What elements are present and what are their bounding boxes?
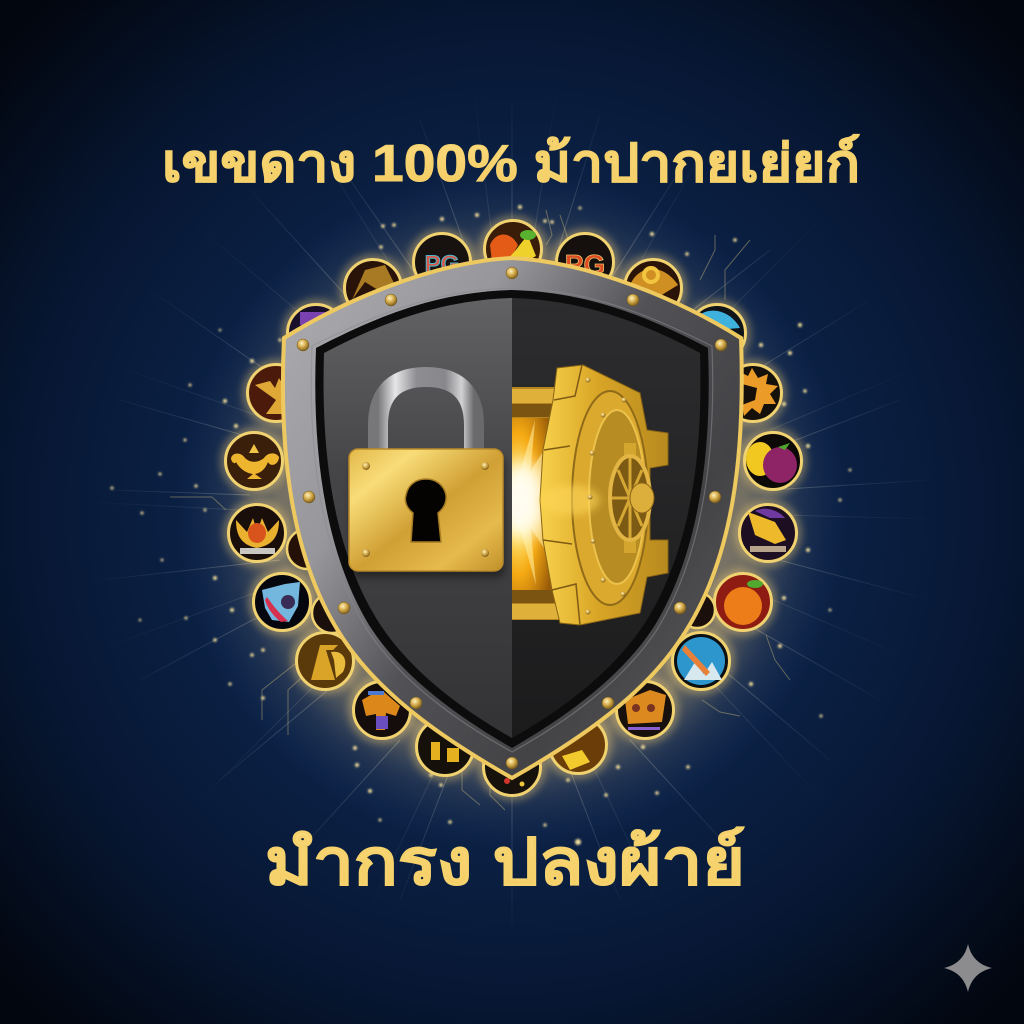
- badge: plum and apple: [744, 432, 802, 490]
- shield: [283, 258, 742, 778]
- badge: fire phoenix: [724, 364, 782, 422]
- shield face right half: [512, 298, 700, 738]
- inner black channel: [315, 290, 709, 748]
- lock shadow: [351, 456, 505, 578]
- badge: purple top left: [288, 304, 344, 362]
- badge: PG blue: PG: [425, 251, 459, 278]
- badge: crown throne: [248, 364, 304, 422]
- light rays: [50, 60, 970, 950]
- subtitle: มำกรง ปลงผ้าย์: [265, 826, 745, 898]
- inner bevel: [311, 288, 713, 752]
- vault door: [540, 365, 668, 625]
- badge: bottom centre: [484, 738, 540, 796]
- wheel spindle: [624, 443, 636, 553]
- circuit traces: [170, 210, 790, 810]
- lock shackle: [378, 377, 474, 450]
- padlock: [349, 377, 505, 578]
- icon: sparkle watermark: [944, 944, 992, 992]
- badge: blue top right: [688, 304, 746, 362]
- rivets: [297, 267, 727, 769]
- badge: blue dragon: [254, 574, 310, 630]
- badge: phoenix emblem: [228, 504, 286, 562]
- vault: [494, 365, 668, 625]
- vault frame: [512, 387, 572, 620]
- badge: PG red: [556, 234, 614, 290]
- halo behind shield: [177, 170, 847, 850]
- lock body: [349, 449, 503, 571]
- badge: inner partial left: [287, 529, 715, 633]
- badge: PG red: PG: [565, 249, 605, 280]
- door ring: [572, 391, 648, 605]
- badge: lamp: [226, 432, 282, 490]
- title: เขขดาง 100% ม้าปากยเย่ยก์: [162, 134, 860, 193]
- lock screws: [362, 462, 489, 557]
- badge: orange fruit: [714, 574, 772, 630]
- badge: bottom gold left: [416, 718, 474, 776]
- badge: crimson mask: [616, 682, 674, 738]
- door glow: [540, 485, 600, 515]
- badge: PG blue: [414, 234, 470, 290]
- badge: fruit top: [484, 220, 542, 278]
- wheel: [610, 456, 650, 540]
- badge: gold serpent: [624, 260, 682, 316]
- keyhole: [405, 479, 446, 542]
- particle dots: [110, 205, 851, 845]
- badge: gold letters: [296, 632, 354, 690]
- badge glow: [220, 215, 807, 801]
- badge: blue anvil: [672, 632, 730, 690]
- shield face left half: [324, 298, 512, 738]
- badge: dark gold creature: [344, 260, 402, 316]
- door bolts: [586, 378, 626, 614]
- badges ring: [220, 215, 807, 801]
- wheel hub: [630, 483, 654, 513]
- shield outer band: [283, 258, 742, 778]
- door recess: [589, 410, 645, 584]
- badge: orange mask left: [354, 682, 410, 738]
- badge: gold mask: [740, 504, 796, 562]
- badge: bottom gold right: [550, 716, 606, 774]
- vault light burst: [512, 418, 564, 590]
